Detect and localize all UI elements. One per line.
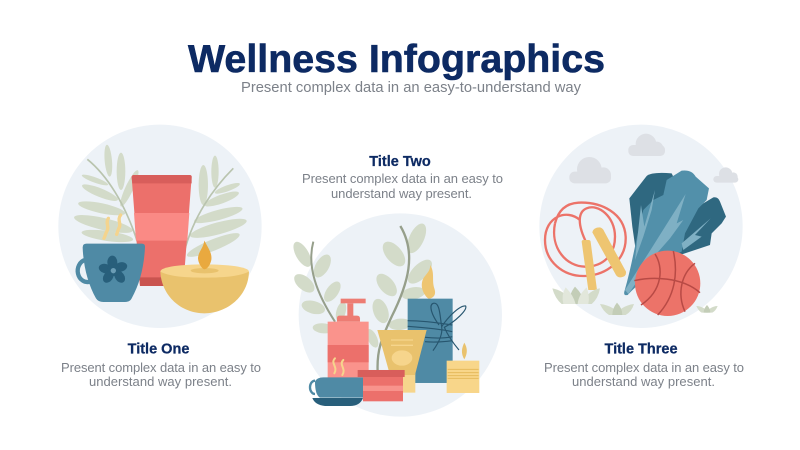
panel: title three [539,125,744,389]
icon: pump bottle [341,299,366,303]
heading: title three: Title Three [604,342,678,358]
icon: steam symbol [333,358,344,375]
icon: right leaves tuft [696,305,718,313]
heading: title one: Title One [128,342,189,358]
text: title two description: Present complex data in an easy to [302,171,503,186]
panel: title one [58,125,262,389]
icon: front lettuce leaf [624,170,709,295]
icon: twine bow [408,303,466,351]
icon: small yellow candle [462,343,467,359]
icon: middle leaves tuft [600,303,634,315]
icon: left palm leaf [73,144,141,245]
text: title one description: Present complex data in an easy to [61,360,261,375]
icon: clouds [569,134,738,183]
icon: teal cup [78,260,90,282]
icon: yellow tube [402,373,415,393]
text: title three description: Present complex data in an easy to [544,360,744,375]
icon: jump rope [545,203,626,276]
icon: red tube [132,175,192,286]
illustration: spa products [58,125,262,328]
icon: dark back leaves [629,173,682,257]
heading: title two: Title Two [369,154,431,170]
icon: right palm leaf [185,156,248,261]
title: Wellness Infographics [188,37,605,81]
panel: title two [290,154,503,417]
icon: basketball [635,251,700,316]
icon: rope handles [582,240,597,290]
illustration: fitness [539,125,743,328]
text: title two description: understand way present. [331,186,472,201]
icon: large teal candle [422,265,435,299]
icon: candle bowl [160,272,249,313]
icon: steam [104,218,108,238]
icon: left leaves tuft [552,287,600,304]
icon: left branch [290,239,348,334]
icon: right branch [364,221,436,349]
icon: leaf veins [625,190,711,294]
illustration: candles and bottles [290,213,502,417]
icon: teal soap dish [310,381,315,394]
text: title one description: understand way present. [89,374,232,389]
icon: flower on cup [98,256,128,285]
subtitle: Present complex data in an easy-to-understand way [241,80,582,96]
text: title three description: understand way present. [572,374,715,389]
icon: red jar [363,376,403,401]
